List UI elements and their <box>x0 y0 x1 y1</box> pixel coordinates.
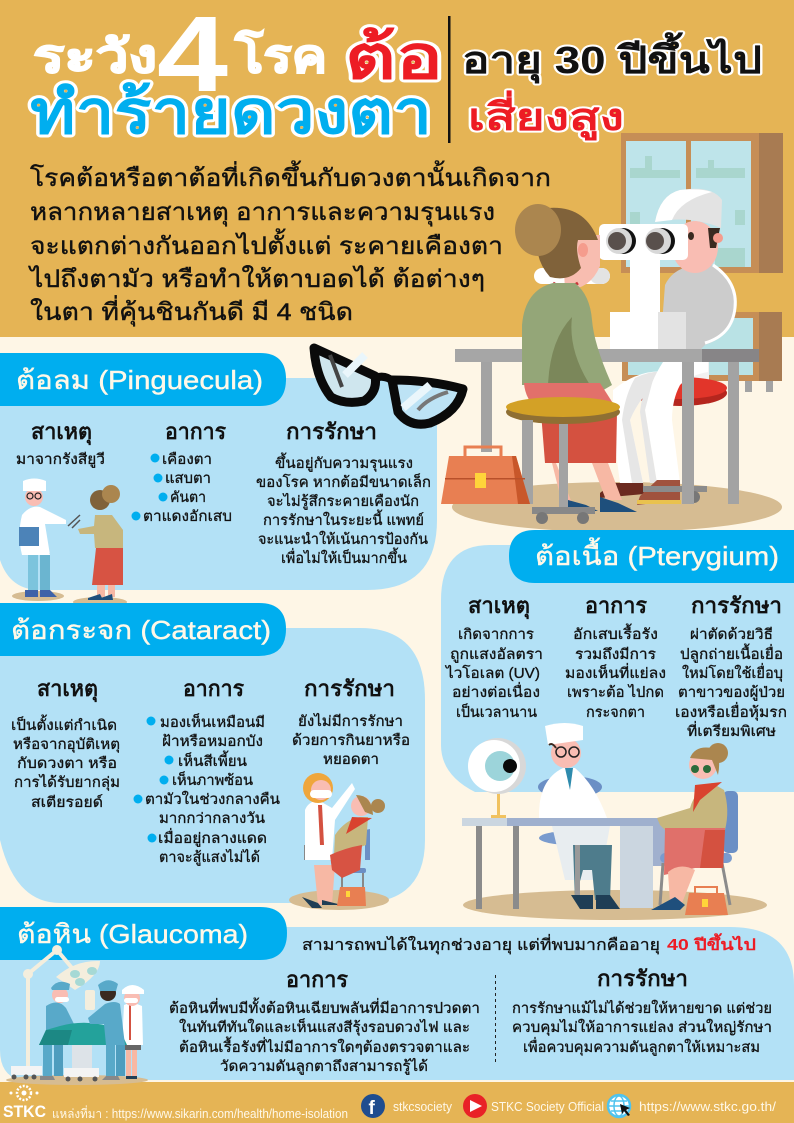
cause column: กับดวงตา หรือ <box>17 755 117 772</box>
patient <box>562 235 600 290</box>
illustration: eye drops <box>289 773 389 910</box>
logo: STKC <box>3 1086 46 1121</box>
facebook name: stkcsociety <box>393 1100 453 1114</box>
treatment column <box>256 419 431 567</box>
icon: youtube <box>463 1094 487 1118</box>
symptoms column <box>134 676 280 866</box>
intro paragraph: ไปถึงตามัว หรือทำให้ตาบอดได้ ต้อต่างๆ <box>28 265 485 293</box>
age note <box>302 933 756 955</box>
youtube name: STKC Society Official <box>491 1100 604 1114</box>
panel: Pterygium <box>441 530 794 920</box>
website url: https://www.stkc.go.th/ <box>639 1100 777 1114</box>
treatment block: เพื่อควบคุมความดันลูกตาให้เหมาะสม <box>523 1037 760 1056</box>
treatment column: จะไม่รู้สึกระคายเคืองนัก <box>267 492 419 510</box>
cause column: สาเหตุ <box>37 676 98 703</box>
title <box>30 0 443 146</box>
title: ทำร้ายดวงตา <box>30 79 432 146</box>
cause column: มาจากรังสียูวี <box>16 451 105 468</box>
intro paragraph: จะแตกต่างกันออกไปตั้งแต่ ระคายเคืองตา <box>30 228 503 260</box>
symptoms block: ในทันทีทันใดและเห็นแสงสีรุ้งรอบดวงไฟ และ <box>179 1017 470 1036</box>
age note: 40 ปีขึ้นไป <box>667 933 756 954</box>
heading: Cataract <box>0 603 286 656</box>
symptoms column <box>565 593 666 721</box>
symptoms column: เคืองตา <box>162 451 212 468</box>
bag <box>695 887 717 895</box>
title: ต้อ <box>345 24 443 91</box>
table <box>455 349 759 362</box>
symptoms column: ตาแดงอักเสบ <box>143 509 232 525</box>
treatment column: ผ่าตัดด้วยวิธี <box>690 626 773 643</box>
symptoms column: ตามัวในช่วงกลางคืน <box>145 790 280 808</box>
treatment block: ควบคุมไม่ให้อาการแย่ลง ส่วนใหญ่รักษา <box>512 1018 772 1036</box>
treatment column: การรักษาในระยะนี้ แพทย์ <box>263 509 424 529</box>
nurse <box>126 1049 131 1076</box>
icon: facebook <box>361 1094 385 1119</box>
cause column: ถูกแสงอัลตรา <box>450 647 543 663</box>
cause column <box>11 676 120 811</box>
heading: Cataract: ต้อกระจก (Cataract) <box>11 615 271 645</box>
symptoms column: อาการ <box>585 593 647 618</box>
illustration: consultation at desk <box>462 723 767 920</box>
header background band <box>0 0 794 337</box>
doctor <box>660 265 735 350</box>
symptoms column: ฝ้าหรือหมอกบัง <box>162 733 263 750</box>
title: โรค <box>234 29 327 82</box>
cause column <box>16 419 105 468</box>
footer band <box>0 1082 794 1123</box>
symptoms column: มองเห็นที่แย่ลง <box>565 663 666 682</box>
symptoms column: มากกว่ากลางวัน <box>159 811 265 827</box>
symptoms column: กระจกตา <box>586 705 645 721</box>
symptoms block: ต้อหินที่พบมีทั้งต้อหินเฉียบพลันที่มีอาการปวดตา <box>169 997 480 1017</box>
surgeon right <box>106 1045 115 1076</box>
symptoms column: เมื่ออยู่กลางแดด <box>158 828 267 847</box>
treatment column: ใหม่โดยใช้เยื่อบุ <box>682 663 783 682</box>
cause column <box>445 593 543 721</box>
title: ระวัง <box>33 30 157 82</box>
surgeon left <box>43 1040 52 1076</box>
symptoms column: ตาจะสู้แสงไม่ได้ <box>159 848 260 866</box>
heading: Pinguecula: ต้อลม (Pinguecula) <box>16 365 263 395</box>
age note: สามารถพบได้ในทุกช่วงอายุ แต่ที่พบมากคืออายุ <box>302 934 660 955</box>
doctor <box>538 776 602 798</box>
cause column: เป็นเวลานาน <box>456 702 537 721</box>
symptoms column: อาการ <box>165 419 226 444</box>
cause column: เป็นตั้งแต่กำเนิด <box>11 714 117 734</box>
symptoms block: อาการ <box>286 967 348 992</box>
treatment column: การรักษา <box>286 419 377 444</box>
treatment column: ตาขาวของผู้ป่วย <box>678 684 785 701</box>
symptoms column <box>132 419 232 525</box>
treatment block: การรักษา <box>597 966 688 991</box>
treatment block <box>512 966 772 1056</box>
slit lamp <box>534 268 610 284</box>
icon: handbag <box>441 447 530 504</box>
cause column: เกิดจากการ <box>458 627 534 643</box>
patient <box>723 791 738 853</box>
treatment column: ของโรค หากต้อมีขนาดเล็ก <box>256 472 431 491</box>
symptoms column: เห็นสีเพี้ยน <box>178 750 247 770</box>
treatment column: ปลูกถ่ายเนื้อเยื่อ <box>680 643 783 663</box>
cause column: สเตียรอยด์ <box>31 794 103 811</box>
treatment column: การรักษา <box>691 593 782 618</box>
cause column: หรือจากอุบัติเหตุ <box>13 736 120 753</box>
symptoms column: มองเห็นเหมือนมี <box>160 712 265 731</box>
illustration: doctor and patient <box>12 478 127 607</box>
symptoms column: เห็นภาพซ้อน <box>172 770 253 789</box>
operating table <box>39 1023 127 1045</box>
cause column: อย่างต่อเนื่อง <box>452 682 540 701</box>
symptoms column: รวมถึงมีการ <box>575 646 656 663</box>
treatment column: จะแนะนำให้เน้นการป้องกัน <box>258 530 428 548</box>
cause column: สาเหตุ <box>31 419 92 446</box>
desk <box>476 826 482 909</box>
symptoms block: ต้อหินเรื้อรังที่ไม่มีอาการใดๆต้องตรวจตาและ <box>179 1036 470 1056</box>
symptoms column: อักเสบเรื้อรัง <box>573 623 658 643</box>
treatment column: ด้วยการกินยาหรือ <box>292 732 410 749</box>
title divider <box>448 16 450 143</box>
cause column: การได้รับยากลุ่ม <box>14 773 120 791</box>
eye model <box>497 793 500 817</box>
heading: Pinguecula <box>0 353 286 406</box>
icon: globe <box>608 1095 630 1117</box>
intro paragraph: หลากหลายสาเหตุ อาการและความรุนแรง <box>30 199 495 227</box>
panel: Cataract <box>0 603 425 910</box>
symptoms column: แสบตา <box>165 471 211 487</box>
heading: Pterygium <box>509 530 794 583</box>
intro paragraph: ในตา ที่คุ้นชินกันดี มี 4 ชนิด <box>30 295 353 327</box>
symptoms column: คันตา <box>170 490 206 506</box>
subtitle: high risk: เสี่ยงสูง <box>468 90 624 141</box>
treatment column: การรักษา <box>304 676 395 701</box>
panel: Glaucoma <box>0 907 794 1085</box>
intro paragraph: โรคต้อหรือตาต้อที่เกิดขึ้นกับดวงตานั้นเกิดจาก <box>30 160 551 192</box>
cause column: สาเหตุ <box>468 593 530 620</box>
treatment column: ที่เตรียมพิเศษ <box>687 721 776 740</box>
source credit: แหล่งที่มา : https://www.sikarin.com/health/home-isolation <box>52 1105 348 1121</box>
symptoms block: วัดความดันลูกตาถึงสามารถรู้ได้ <box>220 1057 428 1075</box>
treatment column: หยอดตา <box>323 752 379 768</box>
heading: Pterygium: ต้อเนื้อ (Pterygium) <box>535 537 779 571</box>
treatment column: เองหรือเยื่อหุ้มรก <box>675 702 787 721</box>
symptoms column: เพราะต้อ ไปกด <box>567 683 664 701</box>
heading: Glaucoma: ต้อหิน (Glaucoma) <box>17 919 248 949</box>
panel: Pinguecula <box>0 353 437 607</box>
icon: glasses <box>314 348 463 424</box>
treatment block: การรักษาแม้ไม่ได้ช่วยให้หายขาด แต่ช่วย <box>512 999 772 1017</box>
treatment column <box>675 593 787 740</box>
icon: facebook: f <box>368 1098 376 1119</box>
treatment column: เพื่อไม่ให้เป็นมากขึ้น <box>281 547 407 567</box>
treatment column: ยังไม่มีการรักษา <box>298 712 403 730</box>
cause column: ไวโอเลต (UV) <box>445 664 540 682</box>
treatment column <box>292 676 410 768</box>
symptoms block <box>169 967 480 1075</box>
illustration: surgical team <box>6 945 148 1085</box>
treatment column: ขึ้นอยู่กับความรุนแรง <box>275 452 413 472</box>
heading: Glaucoma <box>0 907 287 960</box>
subtitle: age 30 and over: อายุ 30 ปีขึ้นไป <box>462 32 762 84</box>
stool <box>506 400 620 424</box>
illustration: eye exam room <box>452 133 783 532</box>
intro paragraph <box>28 160 551 327</box>
logo: STKC: STKC <box>3 1102 46 1121</box>
symptoms column: อาการ <box>183 676 244 701</box>
